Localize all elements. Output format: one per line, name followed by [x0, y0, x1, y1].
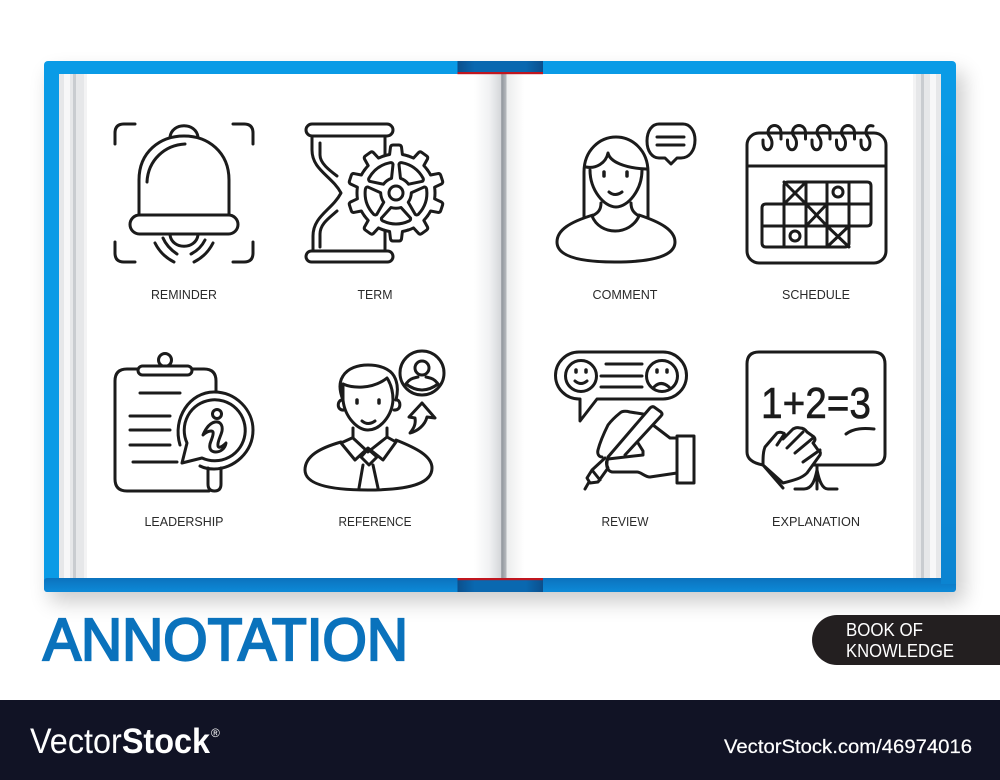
- icon: man with profile circle: [305, 351, 444, 490]
- label: schedule: SCHEDULE: [782, 287, 850, 302]
- book spine shadow: [474, 74, 524, 578]
- term item: [306, 124, 445, 302]
- hourglass: [306, 124, 393, 262]
- equation: 1+2=3: [761, 379, 871, 428]
- label: review: REVIEW: [602, 514, 649, 529]
- top spine band: [458, 61, 543, 74]
- comment item: [557, 124, 695, 302]
- image id: VectorStock.com/46974016: [724, 737, 972, 758]
- icon: whiteboard with hand: [747, 352, 885, 489]
- icon: hourglass with gear: [306, 124, 445, 262]
- reference item: [305, 351, 444, 529]
- explanation item: [747, 352, 885, 529]
- gear: [347, 145, 445, 241]
- icon: clipboard with info magnifier: [115, 354, 253, 491]
- label: leadership: LEADERSHIP: [144, 514, 224, 529]
- white pages: [59, 74, 941, 578]
- title: ANNOTATION: [43, 607, 408, 673]
- reminder item: [115, 124, 253, 302]
- leadership item: [115, 354, 253, 529]
- book: [44, 61, 964, 602]
- label: comment: COMMENT: [592, 287, 658, 302]
- footer bar: [0, 700, 1000, 780]
- icon: bell: [115, 124, 253, 262]
- whiteboard: [747, 352, 885, 465]
- label: explanation: EXPLANATION: [772, 514, 860, 529]
- badge: book of knowledge: [812, 615, 1000, 665]
- label: term: TERM: [358, 287, 392, 302]
- left page edges: [59, 74, 87, 578]
- bottom spine band: [458, 578, 543, 592]
- label: reminder: REMINDER: [151, 287, 217, 302]
- icon: woman with speech bubble: [557, 124, 695, 262]
- review item: [556, 352, 694, 529]
- right page edges: [913, 74, 941, 578]
- blue cover: [44, 61, 956, 592]
- book shadow: [50, 72, 964, 602]
- logo: VectorStock: VectorStock: [30, 722, 210, 761]
- logo registered mark: ®: [211, 726, 220, 740]
- hand and easel: [763, 428, 874, 489]
- icon: review hand writing: [556, 352, 694, 489]
- icon: calendar: [747, 126, 886, 263]
- schedule item: [747, 126, 886, 302]
- badge: book of knowledge: BOOK OF: [846, 620, 923, 640]
- badge: book of knowledge: KNOWLEDGE: [846, 641, 954, 661]
- label: reference: REFERENCE: [338, 514, 412, 529]
